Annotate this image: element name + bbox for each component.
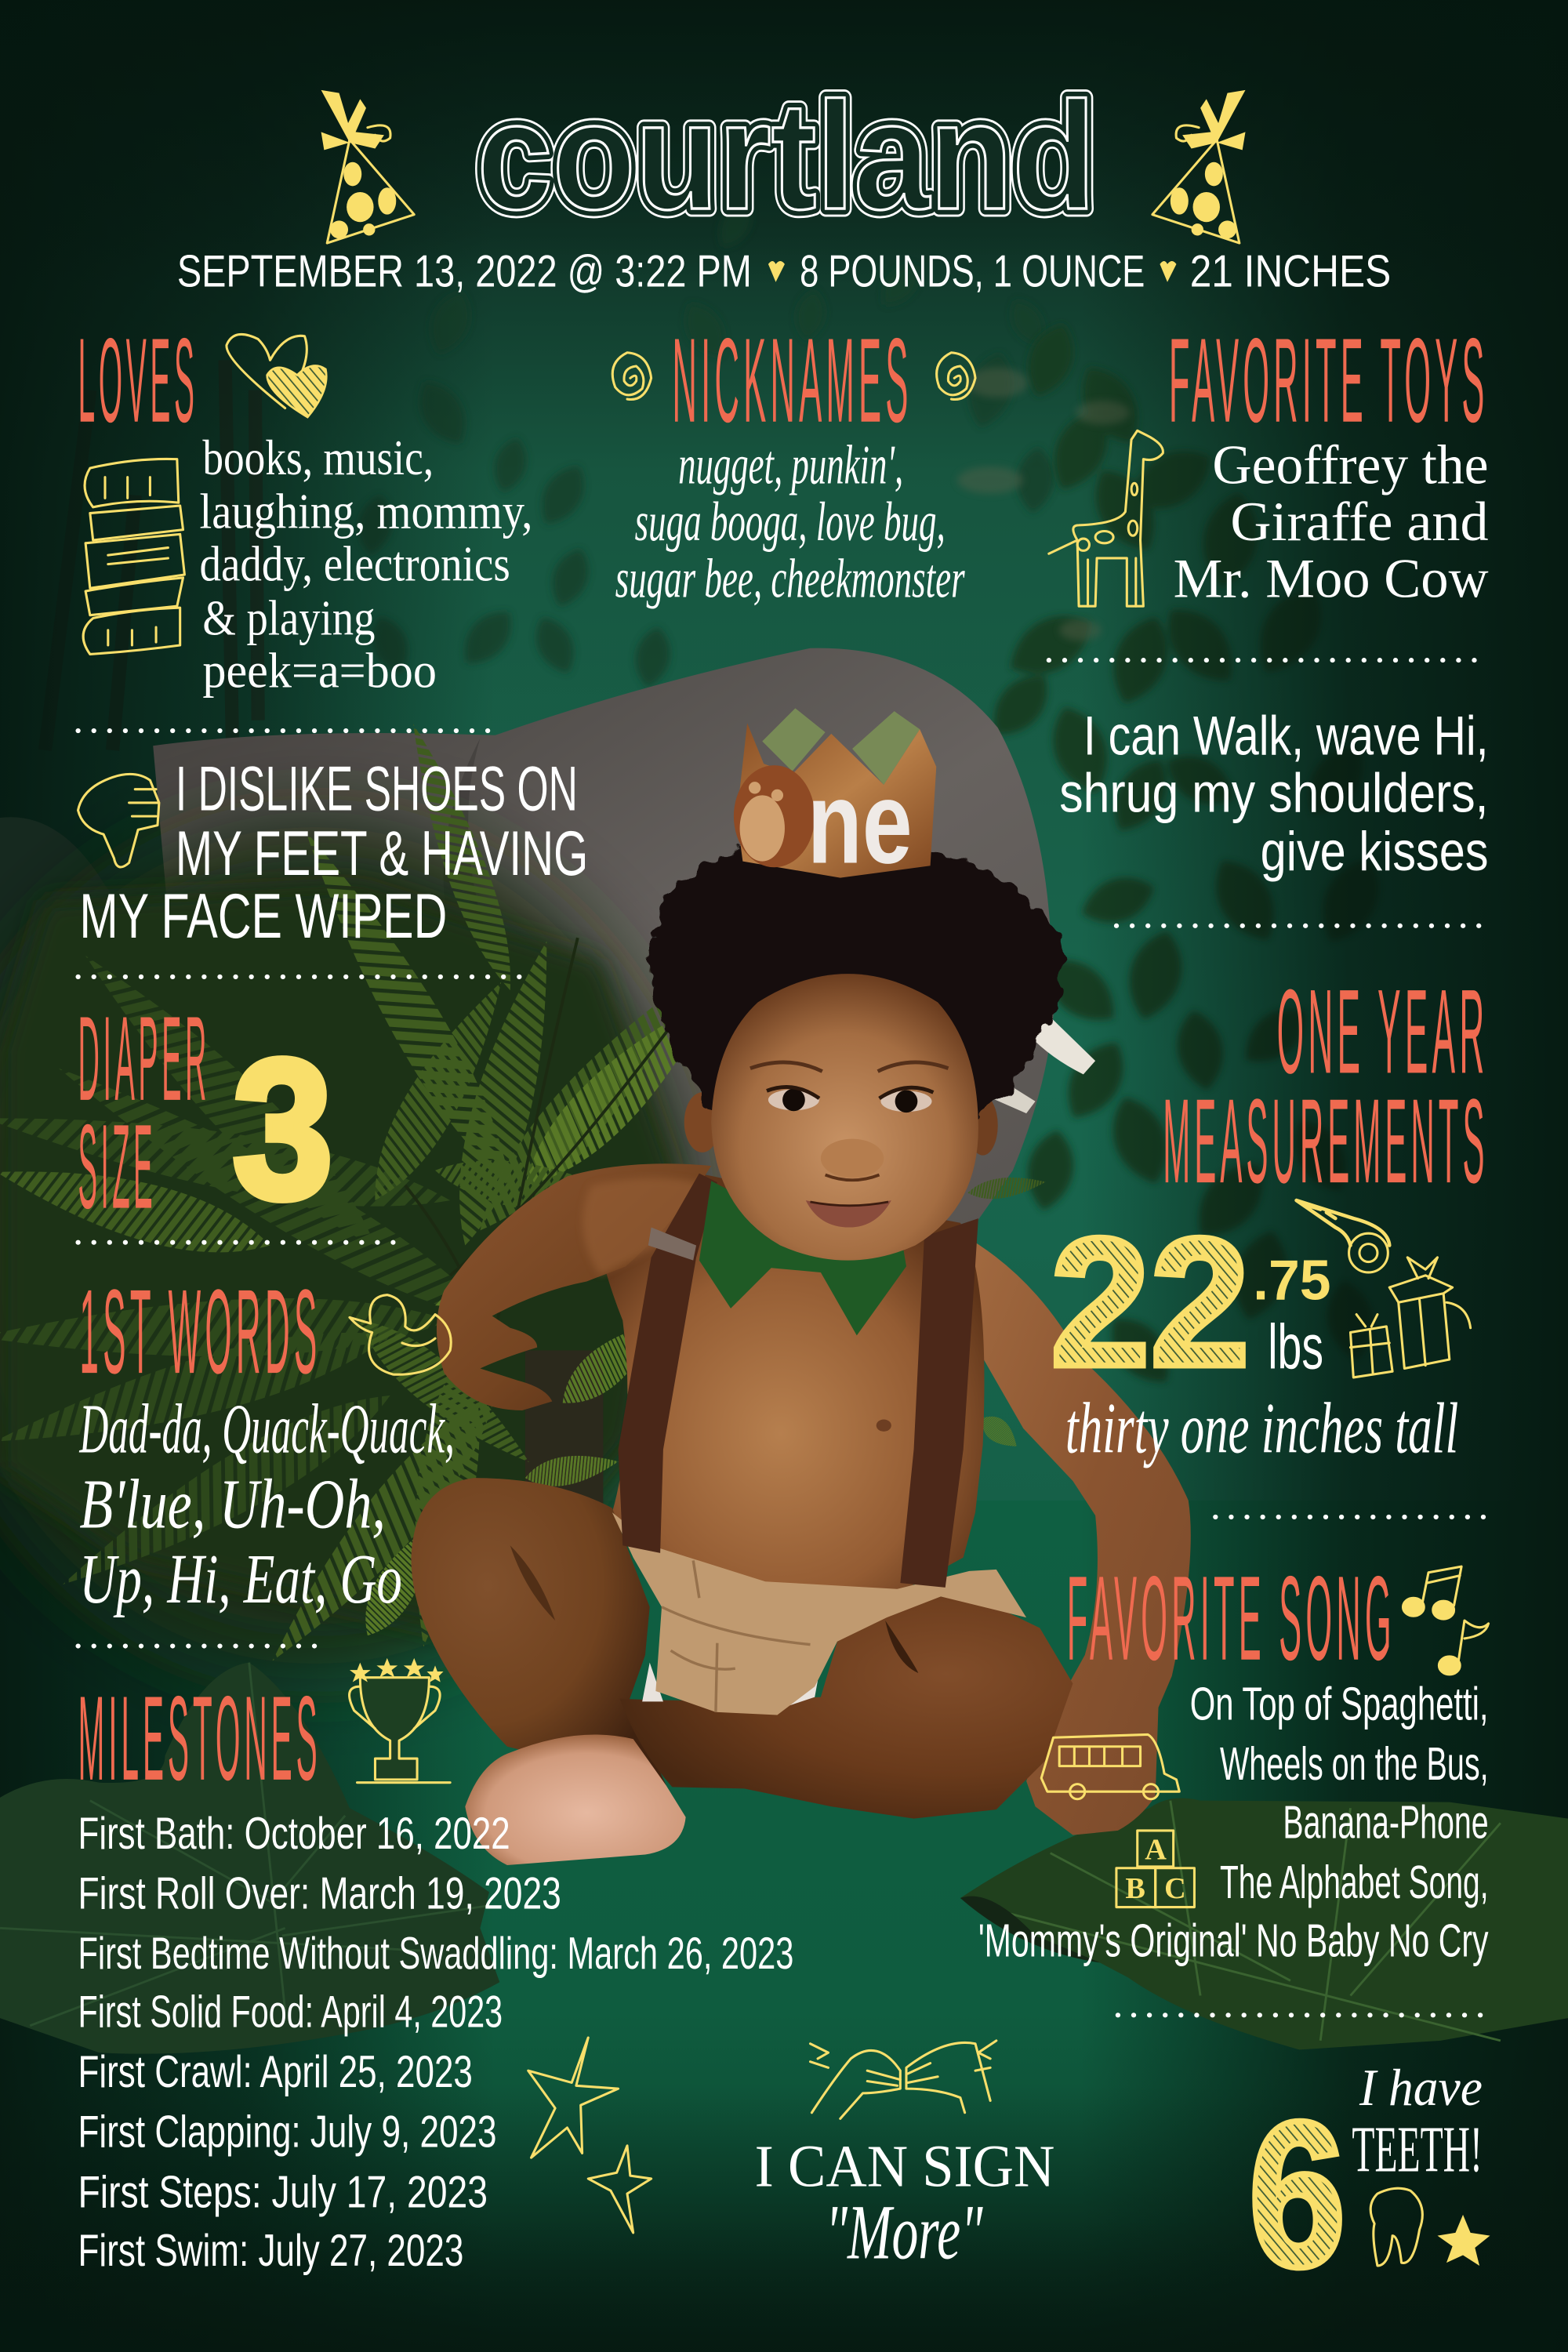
panel: diaper size: SIZE	[78, 1100, 156, 1234]
icon: hearts	[227, 334, 326, 417]
text: I have: I have	[1359, 2059, 1483, 2117]
number: weight decimal: .75	[1253, 1248, 1331, 1312]
text: milestone list: First Solid Food: April 4, 2023	[78, 1987, 503, 2038]
icon: alphabet blocks: B	[1125, 1872, 1145, 1905]
text: NICKNAMES	[672, 314, 913, 448]
panel: first words	[78, 1265, 455, 1618]
text: nicknames list	[615, 434, 965, 610]
text: favorite toys list: Geoffrey the	[1212, 434, 1489, 495]
text: first words list	[78, 1391, 455, 1618]
title: courtland	[477, 71, 1095, 241]
text: nicknames list: sugar bee, cheekmonster	[615, 549, 965, 610]
nipple	[877, 1420, 891, 1432]
text: DIAPER	[78, 992, 210, 1126]
icon: party blower	[1297, 1200, 1389, 1272]
left arm	[437, 1163, 711, 1410]
panel: teeth	[1248, 2059, 1490, 2310]
suspenders	[619, 1174, 717, 1553]
diaper	[642, 1663, 818, 1706]
birth stats line: 8 POUNDS, 1 OUNCE	[800, 247, 1145, 297]
icon: tooth	[1370, 2188, 1422, 2266]
icon: music notes	[1403, 1566, 1489, 1675]
left dark foliage	[0, 817, 153, 1141]
text: loves list: & playing	[202, 591, 375, 646]
left leg	[411, 1478, 666, 1786]
right arm	[960, 1233, 1191, 1835]
icon: spiral right	[937, 353, 975, 400]
text: milestone list: First Swim: July 27, 2023	[78, 2226, 463, 2276]
icon: party hat right	[1152, 90, 1246, 243]
icon: book stack	[83, 459, 184, 654]
icon: alphabet blocks: C	[1164, 1872, 1186, 1905]
text: favorite toys list	[1174, 434, 1489, 610]
panel: one year measurements	[1051, 964, 1489, 1468]
elephant	[153, 648, 1095, 1246]
bottom shade	[0, 2221, 1568, 2352]
icon: duck	[350, 1295, 451, 1374]
monstera leaf right	[960, 1798, 1568, 2049]
torso	[593, 1172, 985, 1594]
text: milestone list: First Bedtime Without Swaddling: March 26, 2023	[78, 1929, 793, 1979]
text: I can sign: I CAN SIGN	[755, 2133, 1054, 2200]
heading: diaper size	[78, 992, 210, 1234]
icon: alphabet blocks	[1116, 1831, 1194, 1907]
panel: nicknames	[612, 314, 975, 610]
icon: party hat left	[321, 90, 414, 243]
panel: diaper size	[78, 992, 333, 1240]
text: 1ST WORDS	[79, 1265, 321, 1399]
text: song list	[978, 1677, 1489, 1967]
text: milestone list: First Crawl: April 25, 2023	[78, 2047, 473, 2097]
panel: skills: shrug my shoulders,	[1059, 762, 1489, 824]
monstera leaf left	[0, 1663, 499, 2054]
text: milestone list: First Bath: October 16, 2022	[78, 1809, 510, 1859]
panel: favorite song	[978, 1552, 1489, 1967]
bow tie	[699, 1181, 906, 1335]
panel: milestones: MILESTONES	[78, 1671, 321, 1806]
shorts	[612, 1512, 1026, 1715]
text: more: "More"	[826, 2188, 983, 2275]
icon: gift boxes	[1350, 1258, 1471, 1377]
dotted dividers	[78, 660, 1489, 2015]
panel: loves	[78, 314, 532, 699]
number: weight 22: 22	[1051, 1201, 1250, 1405]
text: milestone list: First Roll Over: March 19, 2023	[78, 1868, 561, 1918]
icon: doodle stars	[528, 2038, 652, 2233]
text: dislikes: MY FACE WIPED	[79, 881, 447, 952]
panel: sign language	[755, 2041, 1054, 2275]
text: favorite toys list: Mr. Moo Cow	[1174, 549, 1489, 610]
panel: skills	[1059, 706, 1489, 883]
fern	[0, 717, 1047, 1679]
icon: school bus	[1041, 1734, 1179, 1799]
text: loves list	[200, 430, 532, 699]
floor	[0, 1501, 1568, 2352]
text: nicknames list: nugget, punkin',	[678, 434, 903, 495]
text: lbs: lbs	[1268, 1312, 1323, 1382]
text: loves list: books, music,	[202, 430, 434, 485]
text: dislikes	[79, 753, 588, 952]
title: courtland	[477, 71, 1095, 241]
text: first words list: Up, Hi, Eat, Go	[79, 1541, 402, 1618]
tree stems	[45, 360, 258, 750]
crown	[734, 708, 936, 887]
panel: skills: give kisses	[1261, 821, 1489, 883]
title: courtland	[477, 71, 1095, 241]
eyes and brows	[750, 1062, 949, 1112]
baby	[411, 708, 1191, 1865]
birth stats line: SEPTEMBER 13, 2022 @ 3:22 PM	[177, 247, 752, 297]
text: loves list: peek=a=boo	[202, 644, 437, 699]
foot	[465, 1734, 686, 1865]
head	[711, 974, 978, 1261]
text: milestone list	[78, 1809, 793, 2276]
vine leaves on wall	[353, 196, 1393, 1396]
number: 3: 3	[233, 1018, 333, 1240]
text: first words list: B'lue, Uh-Oh,	[79, 1465, 386, 1543]
panel: milestones	[78, 1658, 793, 2276]
text: loves list: laughing, mommy,	[200, 485, 532, 539]
icon: giraffe	[1049, 430, 1163, 606]
icon: thumbs down	[78, 774, 159, 867]
icon: star	[1437, 2215, 1490, 2266]
text: milestone list: First Steps: July 17, 2023	[78, 2167, 488, 2217]
hair	[648, 838, 1062, 1118]
text: milestone list: First Clapping: July 9, 2023	[78, 2107, 496, 2158]
text: favorite toys list: Giraffe and	[1230, 492, 1489, 553]
birth stats line: 21 INCHES	[1190, 247, 1391, 297]
heading: one year measurements	[1163, 964, 1489, 1208]
birth stats line	[177, 247, 1391, 297]
text: dislikes: MY FEET & HAVING	[176, 818, 588, 889]
crown text: ne	[808, 757, 913, 887]
nose and mouth	[806, 1139, 891, 1228]
text: dislikes: I DISLIKE SHOES ON	[176, 753, 578, 824]
icon: alphabet blocks: A	[1145, 1833, 1167, 1866]
icon: spiral left	[612, 353, 652, 400]
icon: trophy	[350, 1658, 450, 1783]
number: 6: 6	[1248, 2078, 1346, 2310]
ears	[684, 1092, 720, 1152]
text: first words list: Dad-da, Quack-Quack,	[78, 1391, 455, 1468]
icon: signing hands	[810, 2041, 996, 2118]
panel: favorite toys	[1049, 314, 1489, 610]
panel: dislikes	[78, 753, 588, 952]
text: loves list: daddy, electronics	[200, 537, 510, 592]
panel: loves: LOVES	[78, 314, 198, 448]
crossed right leg	[619, 1596, 1073, 1819]
text: nicknames list: suga booga, love bug,	[635, 492, 946, 553]
